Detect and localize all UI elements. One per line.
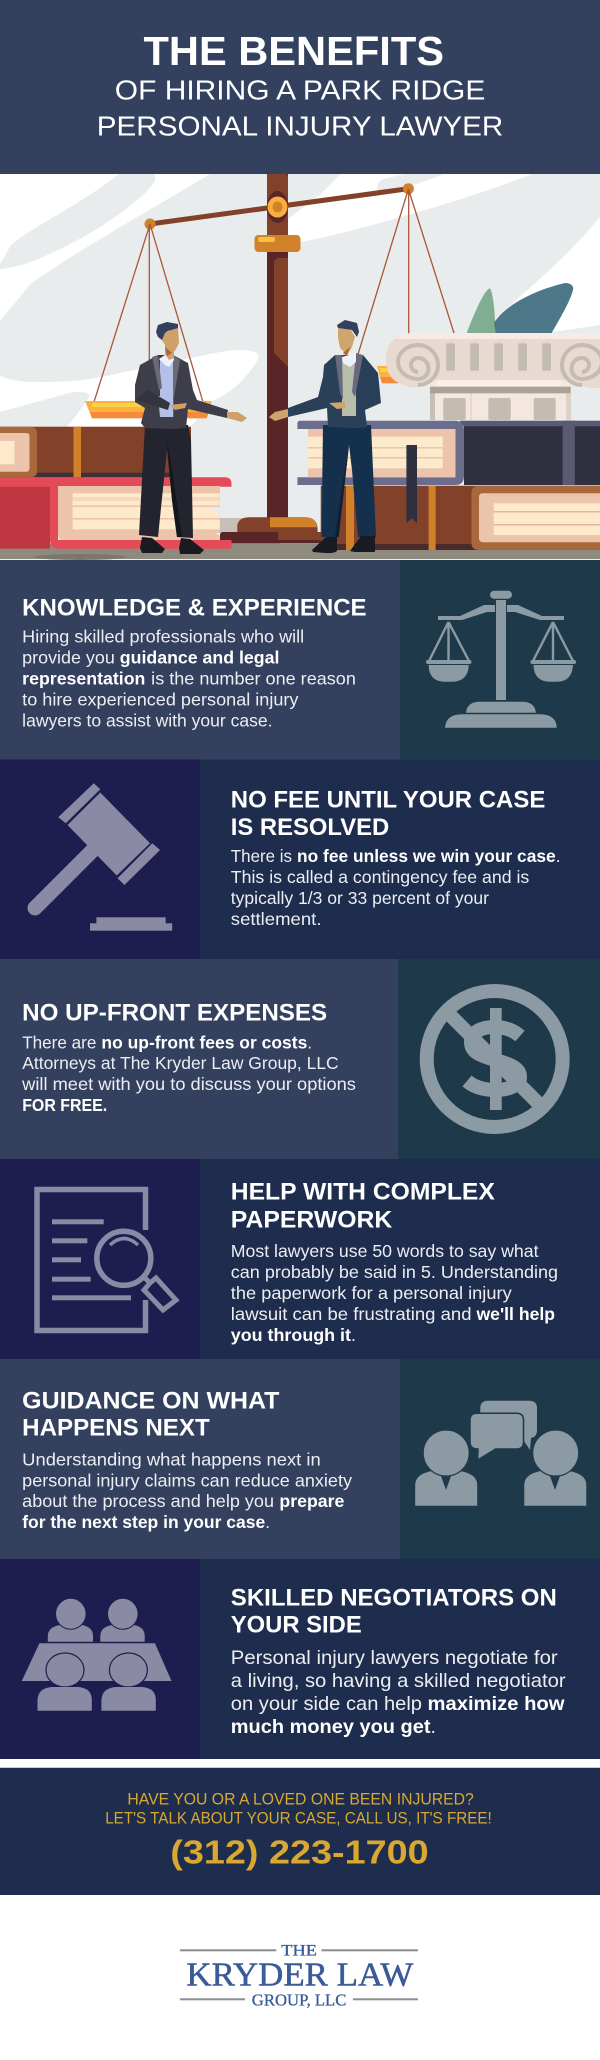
icon: no dollar sign — [427, 991, 563, 1127]
panel: help with complex paperwork — [0, 1159, 600, 1359]
body text: . — [307, 1032, 312, 1052]
body text: prepare — [279, 1491, 345, 1511]
body text: we'll help — [475, 1304, 555, 1324]
body text: lawsuit can be frustrating and — [231, 1304, 472, 1324]
heading: HELP WITH COMPLEX — [231, 1178, 495, 1205]
heading: HAPPENS NEXT — [22, 1415, 210, 1442]
icon: gavel — [35, 783, 172, 931]
right lawyer — [269, 320, 381, 553]
body text: Most lawyers use 50 words to say what — [231, 1241, 539, 1261]
heading: PAPERWORK — [231, 1207, 393, 1234]
scale pole and beam — [144, 174, 414, 519]
body text — [231, 1647, 566, 1738]
body text: personal injury claims can reduce anxiety — [22, 1470, 352, 1490]
logo: The Kryder Law Group — [180, 1943, 418, 2009]
body text: . — [430, 1716, 436, 1738]
body text — [231, 846, 561, 929]
body text: Understanding what happens next in — [22, 1449, 321, 1469]
heading — [231, 1178, 495, 1234]
body text — [21, 1032, 356, 1115]
heading: YOUR SIDE — [231, 1612, 362, 1639]
heading: NO UP-FRONT EXPENSES — [22, 1000, 327, 1027]
heading: NO FEE UNTIL YOUR CASE — [231, 786, 545, 813]
body text: . — [556, 846, 561, 866]
body text: There are — [22, 1032, 96, 1052]
body text: settlement. — [231, 909, 322, 929]
panel: guidance on what happens next — [0, 1359, 600, 1559]
body text: much money you get — [231, 1716, 431, 1738]
panel: no fee until resolved — [0, 760, 600, 959]
body text: . — [351, 1325, 356, 1345]
heading — [231, 786, 545, 841]
body text: provide you — [22, 647, 115, 667]
body text — [22, 1449, 352, 1532]
body text: lawyers to assist with your case. — [22, 710, 273, 730]
body text: . — [265, 1512, 270, 1532]
body text: guidance and legal — [120, 647, 279, 667]
classical column capital — [386, 333, 600, 420]
body text: FOR FREE. — [22, 1095, 107, 1115]
body text: This is called a contingency fee and is — [231, 867, 530, 887]
call to action band — [0, 1767, 600, 1895]
panel: no up-front expenses — [0, 959, 600, 1159]
prompt line one: HAVE YOU OR A LOVED ONE BEEN INJURED? — [127, 1789, 474, 1808]
body text — [22, 626, 356, 730]
logo: The Kryder Law Group: KRYDER LAW — [186, 1957, 414, 1994]
body text: no up-front fees or costs — [101, 1032, 308, 1052]
scale strings — [94, 189, 454, 402]
body text: to hire experienced personal injury — [22, 689, 299, 709]
gavel base under scale — [220, 517, 322, 544]
body text: Personal injury lawyers negotiate for — [231, 1647, 558, 1669]
panel: knowledge and experience — [0, 560, 600, 760]
body text: Hiring skilled professionals who will — [22, 626, 304, 646]
body text: a living, so having a skilled negotiator — [231, 1670, 566, 1692]
scale pans — [85, 366, 398, 418]
body text: maximize how — [428, 1693, 565, 1715]
body text: is the number one reason — [151, 668, 356, 688]
body text — [231, 1241, 558, 1345]
body text: for the next step in your case — [22, 1512, 265, 1532]
body text: There is — [231, 846, 292, 866]
icon: two people talking — [415, 1401, 586, 1506]
body text: representation — [22, 668, 145, 688]
body text: Attorneys at The Kryder Law Group, LLC — [22, 1053, 339, 1073]
prompt line two: LET'S TALK ABOUT YOUR CASE, CALL US, IT'S FREE! — [105, 1808, 492, 1827]
body text: about the process and help you — [22, 1491, 274, 1511]
heading: GUIDANCE ON WHAT — [22, 1387, 280, 1414]
heading: SKILLED NEGOTIATORS ON — [231, 1584, 557, 1611]
header band — [0, 0, 600, 174]
subtitle line two: PERSONAL INJURY LAWYER — [97, 111, 503, 142]
icon: people at negotiating table — [22, 1598, 171, 1711]
left lawyer — [135, 322, 247, 554]
heading — [231, 1584, 557, 1639]
icon: scales of justice — [426, 591, 576, 728]
heading: KNOWLEDGE & EXPERIENCE — [22, 594, 367, 621]
body text: can probably be said in 5. Understanding — [231, 1262, 558, 1282]
icon: document with magnifier — [37, 1190, 176, 1330]
panel: skilled negotiators — [0, 1559, 600, 1759]
body text: on your side can help — [231, 1693, 422, 1715]
title: THE BENEFITS — [144, 28, 444, 74]
body text: typically 1/3 or 33 percent of your — [231, 888, 489, 908]
logo: The Kryder Law Group: GROUP, LLC — [252, 1990, 346, 2009]
body text: will meet with you to discuss your options — [21, 1074, 356, 1094]
illustration: lawyers with scales, books and column — [0, 174, 600, 560]
heading: IS RESOLVED — [231, 814, 389, 841]
body text: no fee unless we win your case — [297, 846, 556, 866]
logo: The Kryder Law Group: THE — [281, 1943, 317, 1960]
phone number: (312) 223-1700 — [170, 1833, 429, 1870]
left book stack — [0, 427, 232, 549]
right book stack — [297, 421, 600, 550]
subtitle line one: OF HIRING A PARK RIDGE — [115, 74, 485, 105]
body text: the paperwork for a personal injury — [231, 1283, 512, 1303]
heading — [22, 1387, 280, 1442]
floor — [0, 518, 600, 560]
leaves — [467, 283, 573, 333]
body text: you through it — [231, 1325, 351, 1345]
